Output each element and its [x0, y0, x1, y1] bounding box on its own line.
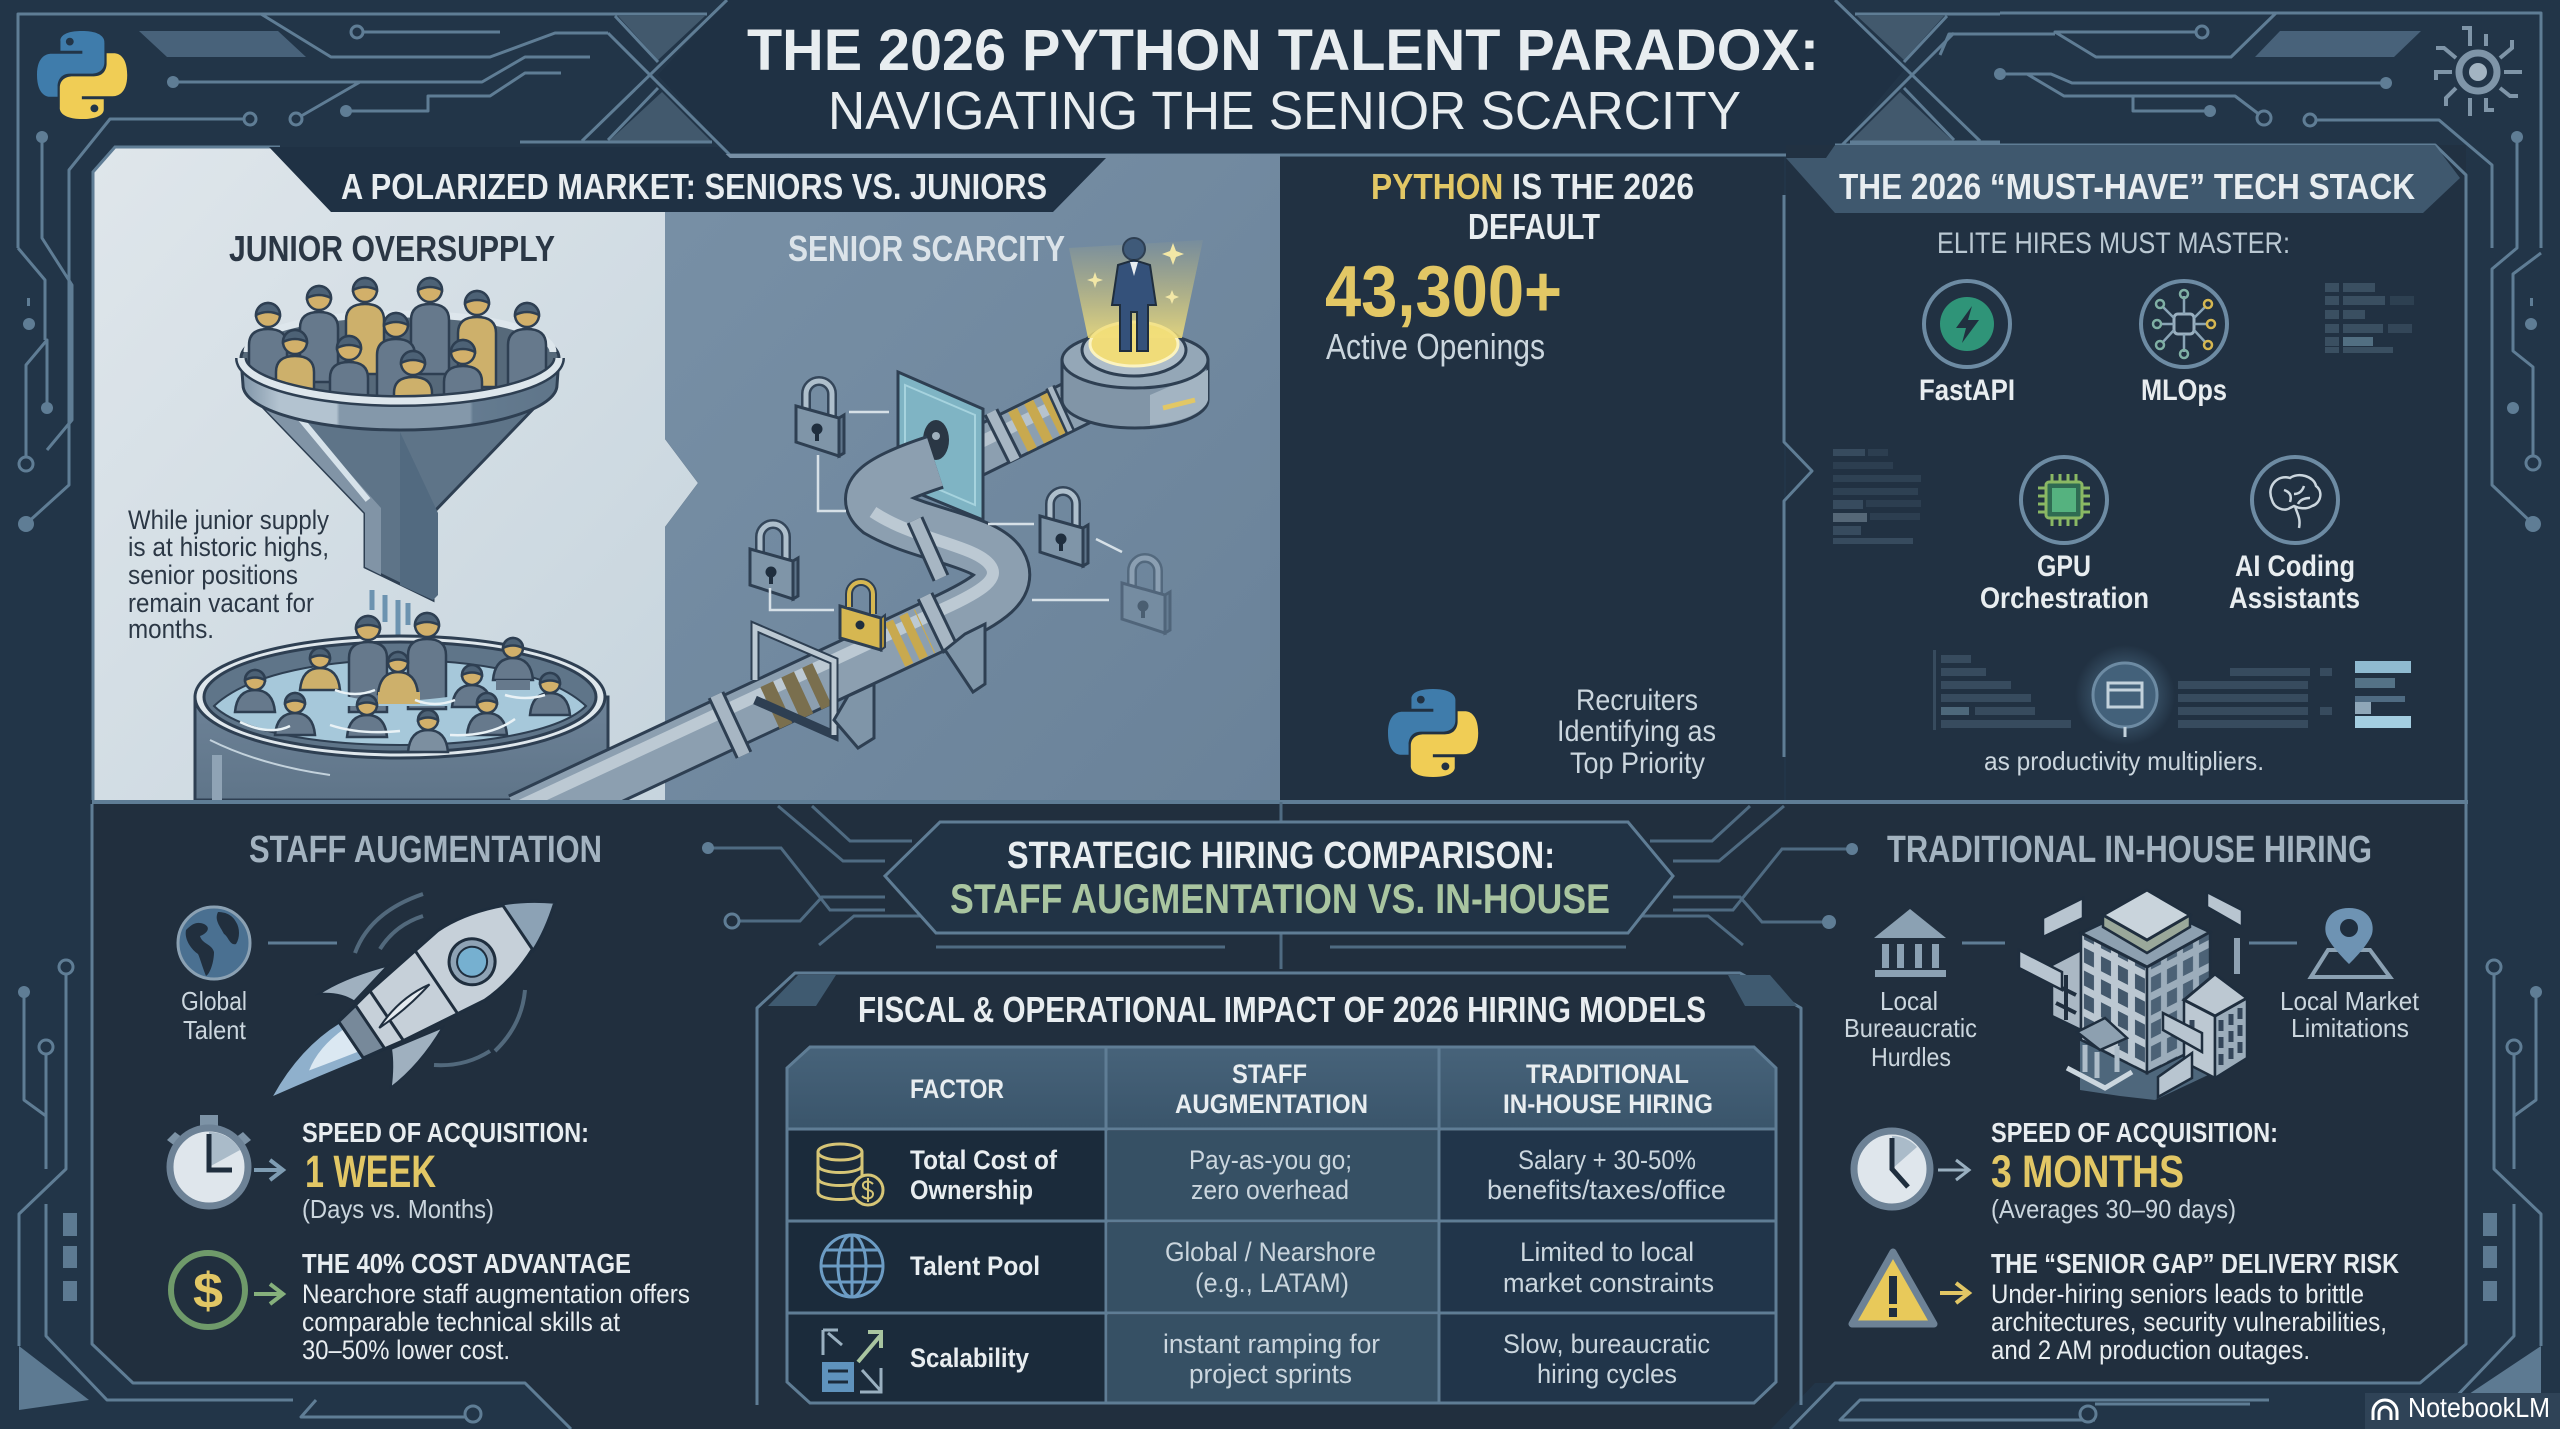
stat: three months [1991, 1117, 2278, 1224]
illustration: lower pipeline [520, 462, 1003, 820]
row: scalability: Scalability [910, 1343, 1029, 1373]
arrow: speed [254, 1160, 283, 1180]
table header row: FACTOR [910, 1074, 1004, 1104]
row: scalability: hiring cycles [1537, 1359, 1677, 1389]
icon: gear circuit top right [2436, 28, 2522, 116]
label: local market limitations: Limitations [2291, 1013, 2409, 1043]
row: talent pool: Limited to local [1520, 1237, 1694, 1267]
stat: active openings [1325, 252, 1562, 367]
caption: productivity multipliers: as productivity multipliers. [1984, 746, 2264, 776]
icon: fastapi [1924, 281, 2010, 367]
row: scalability: Slow, bureaucratic [1503, 1329, 1710, 1359]
panel: fiscal and operational impact table [757, 973, 1801, 1405]
panel heading: polarized market [269, 147, 1106, 212]
banner: strategic hiring comparison: STRATEGIC HIRING COMPARISON: [1007, 835, 1555, 877]
heading: must-have tech stack: THE 2026 “MUST-HAVE” TECH STACK [1839, 166, 2415, 207]
text block: junior supply note: senior positions [128, 560, 298, 590]
text block: junior supply note: months. [128, 614, 214, 644]
stat: recruiters top priority: Identifying as [1557, 715, 1716, 748]
stat: active openings: 43,300+ [1325, 252, 1562, 332]
icon: dollar coin [171, 1253, 245, 1327]
icon: wire globe [821, 1235, 883, 1297]
text block: 40% cost advantage: 30–50% lower cost. [302, 1335, 510, 1365]
icon: warning triangle [1852, 1252, 1934, 1324]
illustration: tank with swimmers [195, 613, 608, 800]
label: local market limitations [2280, 986, 2420, 1043]
row: total cost of ownership: Salary + 30-50% [1518, 1145, 1696, 1175]
stat: speed of acquisition one week: (Days vs. Months) [302, 1194, 494, 1224]
panel heading: polarized market: A POLARIZED MARKET: SENIORS VS. JUNIORS [341, 166, 1047, 207]
stat: recruiters top priority: Top Priority [1570, 747, 1705, 780]
stat: speed of acquisition one week: SPEED OF ACQUISITION: [302, 1117, 589, 1148]
text block: 40% cost advantage [302, 1248, 690, 1365]
text block: junior supply note: remain vacant for [128, 588, 314, 618]
circuit decoration: lower right outer [1840, 960, 2542, 1422]
label: fastapi: FastAPI [1919, 374, 2015, 407]
circuit decoration: lower left outer [18, 960, 481, 1422]
text block: 40% cost advantage: comparable technical skills at [302, 1307, 620, 1337]
stat: three months: 3 MONTHS [1991, 1146, 2184, 1197]
text block: 40% cost advantage: Nearchore staff augmentation offers [302, 1279, 690, 1309]
illustration: locks [750, 381, 1170, 650]
panel: traditional in-house hiring [1844, 829, 2420, 1365]
banner: strategic hiring comparison [885, 822, 1673, 933]
heading: python is the default [1371, 166, 1694, 247]
row: total cost of ownership: Pay-as-you go; [1189, 1145, 1352, 1175]
text block: 40% cost advantage: THE 40% COST ADVANTAGE [302, 1248, 631, 1279]
circuit decoration: top right [1940, 13, 2541, 532]
icon: global talent globe [178, 907, 250, 979]
label: mlops: MLOps [2141, 374, 2227, 407]
row: talent pool: Global / Nearshore [1165, 1237, 1376, 1267]
label: ai coding assistants [2229, 550, 2360, 615]
row: scalability [822, 1329, 1710, 1392]
heading: python is the default: DEFAULT [1468, 206, 1600, 247]
row: talent pool: market constraints [1503, 1268, 1714, 1298]
row: scalability: project sprints [1189, 1359, 1352, 1389]
illustration: upper pipeline [930, 383, 1101, 475]
icon: gpu chip [2021, 457, 2107, 543]
label: gpu orchestration [1980, 550, 2149, 615]
label: local bureaucratic hurdles: Local [1880, 986, 1938, 1016]
title banner [520, 0, 2000, 155]
table header row: IN-HOUSE HIRING [1503, 1089, 1713, 1119]
illustration: platform with senior [1062, 238, 1208, 428]
panel: staff augmentation [167, 829, 690, 1365]
data bars with chip icon [1933, 645, 2411, 745]
title banner: THE 2026 PYTHON TALENT PARADOX: [747, 18, 1819, 83]
label: senior scarcity: SENIOR SCARCITY [788, 228, 1065, 269]
panel: tech stack [1784, 145, 2466, 802]
icon: map pin [2311, 908, 2390, 977]
table title: FISCAL & OPERATIONAL IMPACT OF 2026 HIRING MODELS [858, 989, 1706, 1030]
label: local market limitations: Local Market [2280, 986, 2420, 1016]
circuit decoration: centre connectors [702, 802, 1858, 969]
label: local bureaucratic hurdles: Bureaucratic [1844, 1013, 1977, 1043]
illustration: access panel [898, 372, 983, 520]
title banner: NAVIGATING THE SENIOR SCARCITY [828, 81, 1741, 141]
arrow: speed in-house [1938, 1160, 1969, 1180]
heading: must-have tech stack [1786, 145, 2460, 213]
text block: junior supply note: While junior supply [128, 505, 329, 535]
table header row: AUGMENTATION [1175, 1089, 1368, 1119]
row: scalability: instant ramping for [1163, 1329, 1380, 1359]
data bars: upper right [2325, 283, 2414, 353]
stat: active openings: Active Openings [1326, 326, 1545, 367]
table header row: TRADITIONAL [1526, 1059, 1689, 1089]
heading: python is the default: PYTHON IS THE 2026 [1371, 166, 1694, 207]
icon: mlops [2141, 281, 2227, 367]
stat: speed of acquisition one week [302, 1117, 589, 1224]
panel: polarized market illustration [93, 147, 1280, 820]
label: elite hires must master: ELITE HIRES MUST MASTER: [1937, 227, 2290, 260]
icon: coins [818, 1144, 883, 1205]
label: global talent: Talent [183, 1015, 247, 1045]
label: ai coding assistants: Assistants [2229, 582, 2360, 615]
panel: lower section frame [92, 802, 2468, 1429]
stat: speed of acquisition one week: 1 WEEK [305, 1146, 436, 1197]
text block: senior gap delivery risk: THE “SENIOR GAP” DELIVERY RISK [1991, 1248, 2399, 1279]
icon: scaling arrows [822, 1330, 881, 1392]
heading: staff augmentation: STAFF AUGMENTATION [249, 829, 602, 871]
arrow: cost [254, 1284, 283, 1304]
stat: three months: (Averages 30–90 days) [1991, 1194, 2236, 1224]
label: junior oversupply: JUNIOR OVERSUPPLY [229, 228, 555, 269]
icon: python logo top left [37, 31, 127, 119]
heading: traditional in-house: TRADITIONAL IN-HOUSE HIRING [1887, 829, 2372, 871]
label: gpu orchestration: GPU [2037, 550, 2091, 583]
icon: stopwatch [167, 1115, 251, 1206]
text block: senior gap delivery risk [1991, 1248, 2399, 1365]
icon: dollar coin: $ [193, 1263, 223, 1319]
icon: clock [1854, 1131, 1930, 1207]
watermark: NotebookLM [2365, 1392, 2560, 1429]
label: gpu orchestration: Orchestration [1980, 582, 2149, 615]
text block: junior supply note [128, 505, 329, 644]
table header row [910, 1059, 1713, 1119]
text block: senior gap delivery risk: Under-hiring seniors leads to brittle [1991, 1279, 2364, 1309]
row: total cost of ownership: Ownership [910, 1175, 1033, 1205]
illustration: rocket [240, 856, 590, 1145]
circuit decoration: top left [18, 14, 608, 532]
text block: senior gap delivery risk: architectures, security vulnerabilities, [1991, 1307, 2387, 1337]
row: total cost of ownership: Total Cost of [910, 1145, 1058, 1175]
row: total cost of ownership: benefits/taxes/office [1487, 1175, 1726, 1205]
icon: brain [2252, 457, 2338, 543]
illustration: funnel with crowd [241, 278, 559, 640]
stat: recruiters top priority [1557, 684, 1716, 780]
row: talent pool [821, 1235, 1714, 1298]
row: total cost of ownership [818, 1144, 1726, 1205]
row: total cost of ownership: zero overhead [1191, 1175, 1349, 1205]
arrow: risk [1940, 1283, 1969, 1303]
row: talent pool: (e.g., LATAM) [1195, 1268, 1349, 1298]
text block: senior gap delivery risk: and 2 AM production outages. [1991, 1335, 2310, 1365]
table [787, 1047, 1776, 1403]
banner: strategic hiring comparison: STAFF AUGMENTATION VS. IN-HOUSE [950, 875, 1610, 922]
label: global talent [181, 986, 247, 1045]
stat: three months: SPEED OF ACQUISITION: [1991, 1117, 2278, 1148]
row: talent pool: Talent Pool [910, 1251, 1040, 1281]
label: local bureaucratic hurdles [1844, 986, 1977, 1072]
label: local bureaucratic hurdles: Hurdles [1871, 1042, 1951, 1072]
stat: recruiters top priority: Recruiters [1576, 684, 1698, 717]
label: ai coding assistants: AI Coding [2235, 550, 2355, 583]
text block: junior supply note: is at historic highs, [128, 532, 329, 562]
label: global talent: Global [181, 986, 247, 1016]
illustration: office building [2019, 890, 2247, 1100]
icon: python logo [1388, 689, 1478, 777]
panel: python default stats [1280, 157, 1784, 800]
table header row: STAFF [1232, 1059, 1307, 1089]
icon: bank [1874, 909, 1946, 977]
data bars: middle left [1833, 449, 1921, 544]
